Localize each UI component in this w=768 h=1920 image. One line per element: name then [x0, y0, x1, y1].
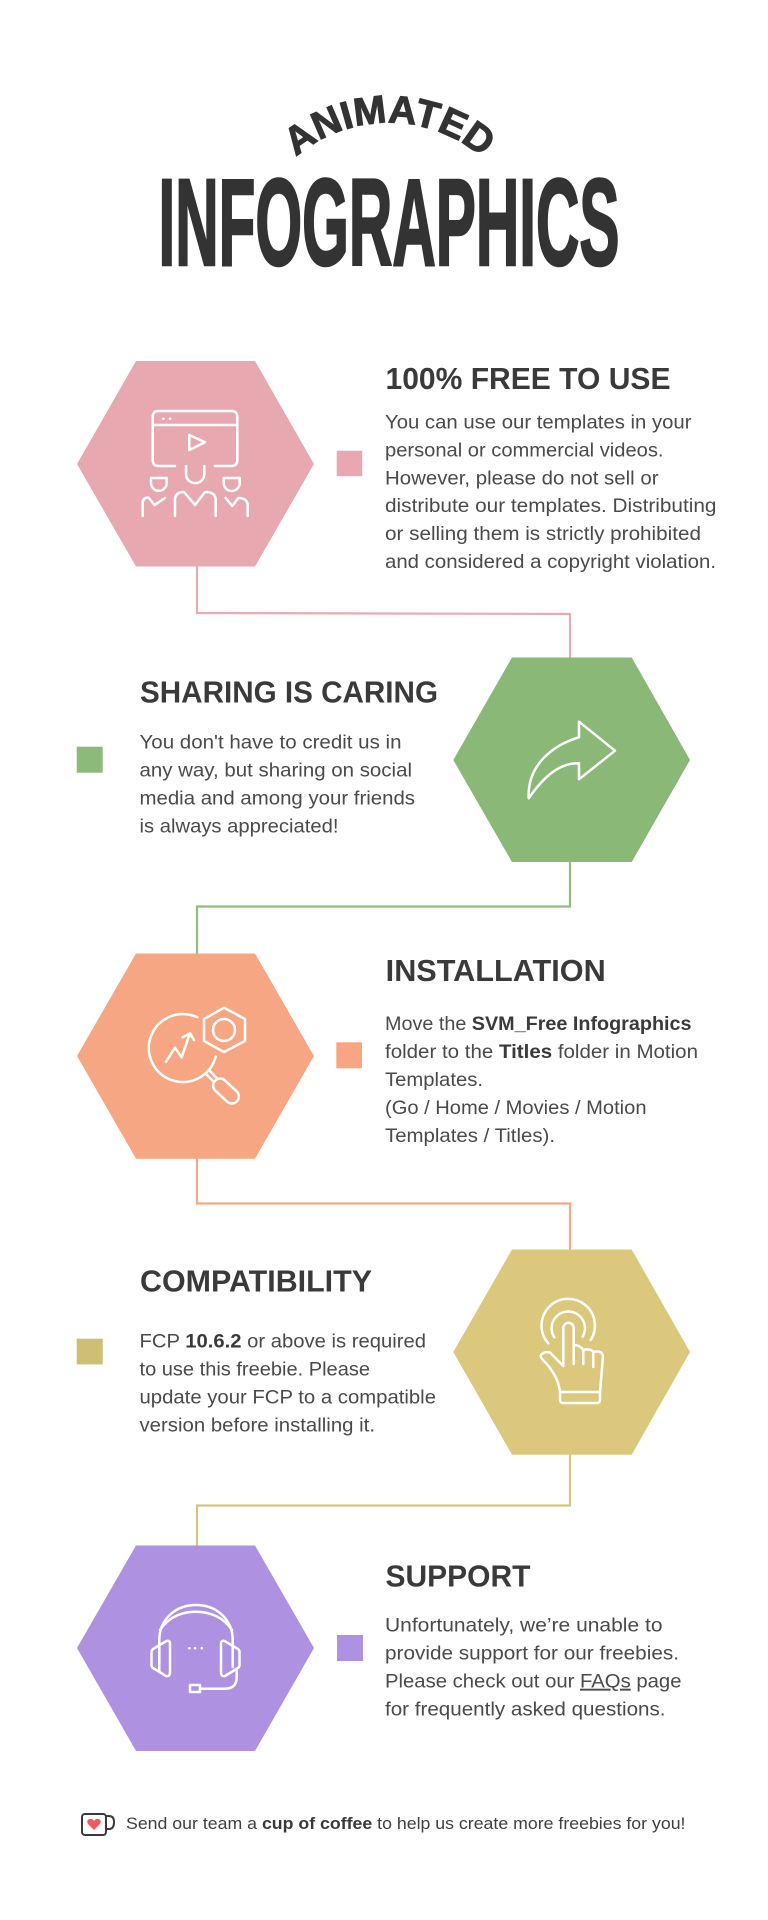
body text — [140, 732, 415, 838]
body text: Move the SVM_Free Infographics — [385, 1013, 692, 1035]
body text: (Go / Home / Movies / Motion — [385, 1097, 646, 1119]
connector: green, step 2 to step 3 — [197, 861, 570, 954]
body text: You don't have to credit us in — [140, 732, 402, 754]
icon: magnifier, chart and nut — [149, 1008, 245, 1106]
title: curved word ANIMATED: ANIMATED — [288, 95, 493, 157]
marker square — [337, 1635, 363, 1661]
marker square — [77, 747, 103, 773]
heading: 100% FREE TO USE — [386, 362, 670, 396]
icon: coffee cup with heart — [82, 1814, 114, 1835]
body text: media and among your friends — [140, 788, 415, 810]
body text: Templates / Titles). — [385, 1125, 555, 1147]
footer text: Send our team a cup of coffee to help us create more freebies for you! — [126, 1814, 686, 1833]
title — [158, 95, 620, 292]
icon: share arrow — [529, 722, 615, 798]
body text: However, please do not sell or — [385, 468, 659, 490]
panel: installation — [77, 954, 698, 1159]
body text: for frequently asked questions. — [385, 1698, 666, 1720]
heading: COMPATIBILITY — [140, 1265, 372, 1299]
body text: is always appreciated! — [140, 816, 338, 838]
heading: SUPPORT — [386, 1560, 531, 1594]
body text: You can use our templates in your — [385, 412, 692, 434]
panel: sharing is caring — [77, 658, 690, 862]
body text — [385, 412, 716, 573]
body text: or selling them is strictly prohibited — [385, 523, 701, 545]
body text: Unfortunately, we’re unable to — [385, 1615, 663, 1637]
hexagon: green — [453, 658, 690, 862]
icon: tapping hand — [541, 1299, 603, 1403]
body text: distribute our templates. Distributing — [385, 495, 716, 517]
body text: provide support for our freebies. — [385, 1643, 679, 1665]
connector: yellow, step 4 to step 5 — [197, 1454, 570, 1546]
hexagon: purple — [77, 1546, 314, 1751]
body text — [385, 1615, 682, 1720]
body text — [140, 1331, 436, 1436]
hexagon: yellow — [453, 1250, 690, 1455]
heading: INSTALLATION — [386, 954, 606, 988]
marker square — [337, 451, 362, 476]
body text: folder to the Titles folder in Motion — [385, 1041, 698, 1063]
body text: any way, but sharing on social — [140, 760, 412, 782]
hexagon: orange — [77, 954, 314, 1159]
body text: to use this freebie. Please — [140, 1359, 370, 1381]
panel: compatibility — [77, 1250, 690, 1455]
marker square — [336, 1042, 362, 1068]
icon: headset — [152, 1605, 240, 1692]
marker square — [77, 1339, 103, 1364]
footer — [82, 1814, 686, 1835]
body text: Templates. — [385, 1069, 483, 1091]
body text: FCP 10.6.2 or above is required — [140, 1331, 426, 1353]
body text: personal or commercial videos. — [385, 440, 664, 462]
body text: version before installing it. — [140, 1414, 375, 1436]
hexagon: pink — [77, 361, 314, 566]
panel: support — [77, 1546, 682, 1751]
body text: update your FCP to a compatible — [140, 1386, 436, 1408]
connector: orange, step 3 to step 4 — [197, 1158, 570, 1250]
heading: SHARING IS CARING — [140, 676, 438, 710]
panel: 100% free to use — [77, 361, 716, 573]
body text — [385, 1013, 698, 1147]
body text: and considered a copyright violation. — [385, 551, 716, 573]
icon: video audience — [143, 411, 248, 516]
body text: Please check out our FAQs page — [385, 1671, 682, 1693]
connector: pink, step 1 to step 2 — [197, 566, 570, 658]
